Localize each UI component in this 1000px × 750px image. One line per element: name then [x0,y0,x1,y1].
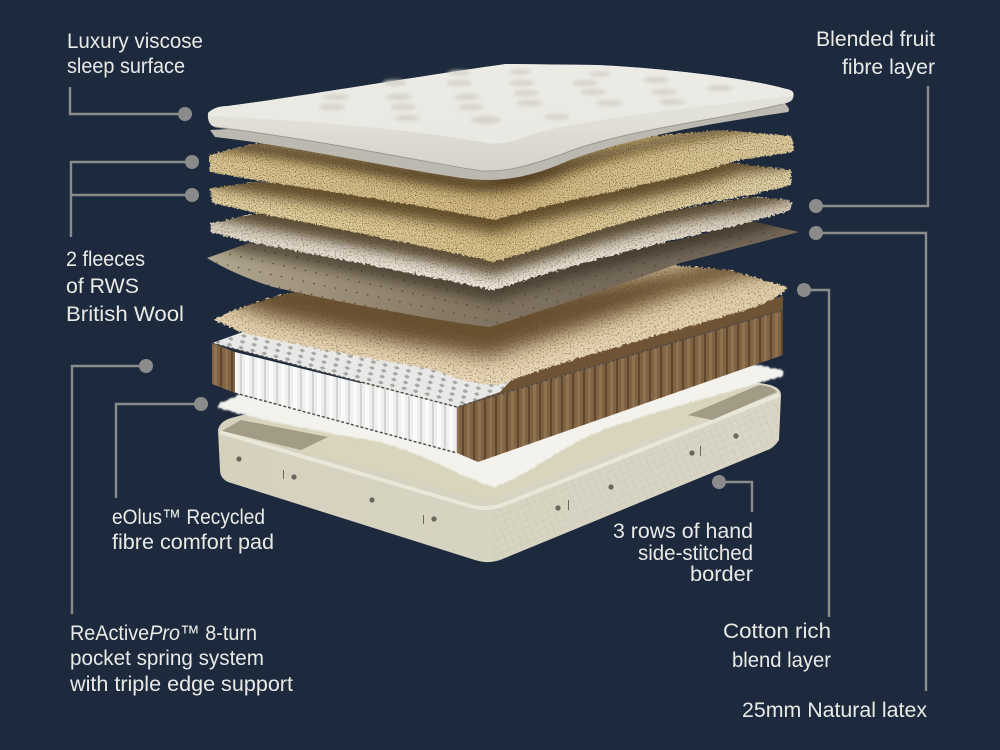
label: cotton blend: Cotton rich [723,620,831,643]
label: cotton blend [723,620,831,672]
leader: side-stitched border [712,475,752,512]
label: side-stitched: border [690,563,753,586]
leader: 2 fleeces [71,155,199,237]
white pocket springs [235,352,457,453]
leader: comfort pad [116,397,208,498]
layer: stitched base mattress [218,345,781,562]
layer: second wool fleece [209,162,792,263]
label: 2 fleeces: of RWS [66,275,139,298]
label: fruit fibre: Blended fruit [816,28,935,51]
layer: pocket spring unit [212,296,783,462]
label: side-stitched: 3 rows of hand [613,520,753,543]
layer: eOlus comfort pad [218,362,783,487]
mattress exploded layer stack [207,64,799,562]
label: eOlus pad [112,506,274,554]
label: ReActivePro [69,622,293,696]
leader: latex [809,226,926,691]
brown pocket springs [457,310,783,462]
label: luxury viscose: sleep surface [67,55,185,78]
label: 2 fleeces [66,248,184,326]
quilting tufts [319,70,733,124]
leader: fruit fibre [809,86,928,213]
left brown pocket end [212,343,235,393]
layer: luxury viscose sleep surface [208,64,794,171]
spring tops [212,308,783,407]
layer: first wool fleece [208,130,794,221]
layer: 25mm natural latex [207,221,799,327]
label: ReActivePro: with triple edge support [69,673,293,696]
layer: blended fruit fibre [210,196,792,290]
layer: pad underside sheet [210,100,789,180]
label: cotton blend: blend layer [732,649,831,672]
label: fruit fibre: fibre layer [842,56,935,79]
layer: cotton rich blend [214,264,788,386]
leader: luxury viscose sleep surface [70,87,192,121]
label: latex: 25mm Natural latex [742,699,927,722]
label: eOlus pad: fibre comfort pad [112,531,274,554]
label: luxury viscose: Luxury viscose [67,30,203,53]
label: eOlus pad: eOlus™ Recycled [112,506,265,529]
label: fruit fibre [816,28,935,79]
leader: cotton blend [797,283,829,617]
label: 2 fleeces: British Wool [66,303,184,326]
leader: spring system [72,359,153,614]
label: 2 fleeces: 2 fleeces [66,248,145,271]
label: side-stitched [613,520,753,586]
label: side-stitched: side-stitched [638,542,753,565]
label: ReActivePro: pocket spring system [70,647,264,670]
label: ReActivePro: ReActivePro™ 8-turn [70,622,257,645]
label: luxury viscose [67,30,203,78]
